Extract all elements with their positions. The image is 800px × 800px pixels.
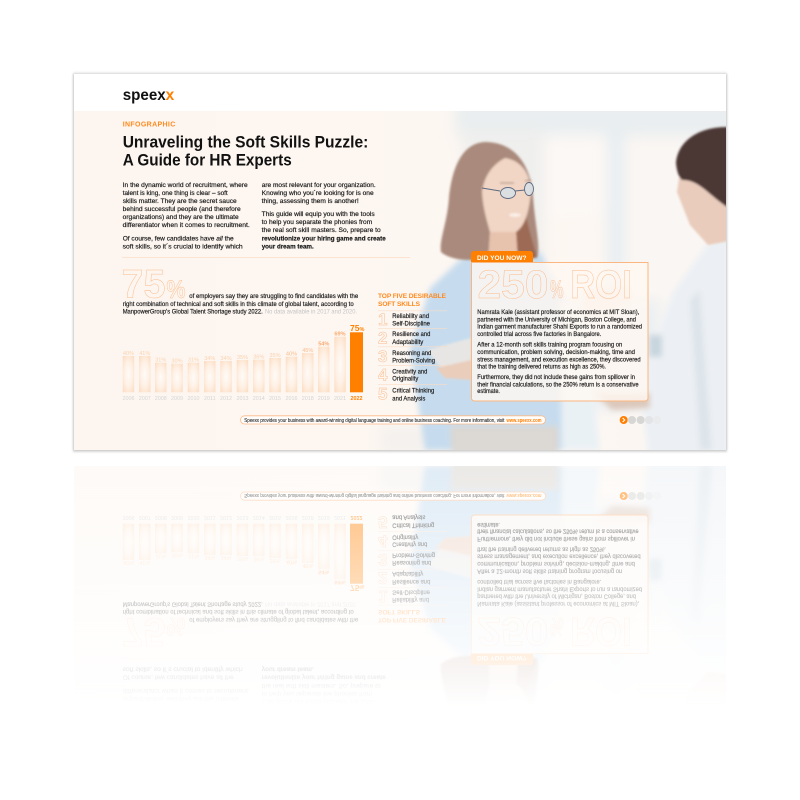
- bar chart: employers struggling by year: 40%: [123, 351, 134, 357]
- intro text column 1: Of course, few candidates have all the: [123, 235, 234, 242]
- statistic description: ManpowerGroup's Global Talent Shortage study 2022.: [123, 308, 263, 316]
- statistic description: right combination of technical and soft skills in this climate of global talent, according to: [123, 301, 354, 308]
- skill names: Reasoning and: [392, 350, 432, 357]
- bar chart: employers struggling by year: 41%: [139, 351, 150, 357]
- skill names: Problem-Solving: [392, 357, 435, 364]
- big number: 250% ROI: [478, 263, 632, 307]
- skill numerals: 5: [378, 384, 387, 404]
- skill numerals: 4: [378, 366, 388, 384]
- intro text column 2: [262, 182, 386, 250]
- intro text column 2: revolutionize your hiring game and create: [262, 235, 386, 242]
- bar chart: employers struggling by year: 2009: [171, 396, 183, 402]
- title: A Guide for HR Experts: [123, 152, 292, 170]
- panel body text: controlled trial across five factories in Bangalore.: [477, 331, 601, 338]
- skill names: Self-Discipline: [392, 320, 430, 327]
- skill names: Reliability and: [392, 313, 429, 320]
- skill names: Creativity and: [392, 368, 428, 375]
- statistic description: No data available in 2017 and 2020.: [265, 308, 357, 316]
- intro text column 2: your dream team.: [262, 243, 314, 250]
- heading: top five: TOP FIVE DESIRABLE: [378, 293, 447, 300]
- skill names: and Analysis: [392, 395, 426, 402]
- statistic: 75%: %: [166, 276, 186, 304]
- logo: speexx: speex: [123, 87, 166, 104]
- bar chart: employers struggling by year: 2011: [204, 396, 216, 402]
- title: Unraveling the Soft Skills Puzzle:: [123, 134, 368, 152]
- bar chart: employers struggling by year: 54%: [318, 342, 329, 348]
- woman seen from behind: [582, 127, 740, 455]
- bar chart: employers struggling by year: 31%: [155, 358, 166, 364]
- panel body text: partnered with the University of Michigan, Boston College, and: [477, 316, 636, 323]
- callout: 250% ROI panel: [471, 251, 648, 401]
- bar chart: employers struggling by year: 34%: [204, 356, 215, 362]
- skill numerals: [378, 310, 388, 404]
- bar chart: employers struggling by year: 2012: [220, 396, 232, 402]
- bar chart: employers struggling by year: 36%: [253, 355, 264, 361]
- bar chart: employers struggling by year: 2008: [155, 396, 167, 402]
- skill names: [392, 313, 435, 402]
- tab: did you now: DID YOU NOW?: [477, 255, 526, 262]
- pagination dots: [620, 416, 661, 424]
- infographic card with mirrored reflection: [74, 74, 726, 450]
- intro text column 1: [123, 182, 250, 250]
- bar chart: employers struggling by year: 75%: [350, 323, 364, 333]
- bar chart: employers struggling by year: 2006: [122, 396, 134, 402]
- bar chart: employers struggling by year: 45%: [302, 348, 313, 354]
- footer strip: more information: [240, 416, 546, 424]
- intro text column 1: skills matter. They are the secret sauce: [123, 198, 237, 205]
- panel: top five desirable soft skills: [378, 293, 447, 404]
- intro text column 1: soft skills, so it´s crucial to identify which: [123, 243, 243, 250]
- bar chart: employers struggling by year: 2013: [236, 396, 248, 402]
- title: [123, 134, 368, 170]
- bar chart: employers struggling by year: 2019: [318, 396, 330, 402]
- intro text column 1: organizations) and they are the ultimate: [123, 214, 239, 221]
- panel body text: After a 12-month soft skills training program focusing on: [477, 342, 623, 349]
- intro text column 1: differentiator when it comes to recruitment.: [123, 222, 250, 229]
- bar chart: employers struggling by year: 2014: [253, 396, 265, 402]
- panel body text: communication, problem solving, decision-making, time and: [477, 349, 635, 356]
- statistic description: of employers say they are struggling to find candidates with the: [189, 293, 359, 300]
- intro text column 1: behind successful people (and therefore: [123, 206, 241, 213]
- bar chart: employers struggling by year: 2007: [139, 396, 151, 402]
- big number: 250% ROI: ROI: [570, 263, 632, 307]
- eyebrow: infographic: INFOGRAPHIC: [123, 122, 175, 128]
- icon: glasses: [482, 182, 534, 198]
- bar chart: employers struggling by year: 40%: [286, 352, 297, 358]
- bar chart: employers struggling by year: 30%: [171, 359, 183, 365]
- skill numerals: 1: [378, 310, 387, 329]
- panel body text: that the training delivered returns as high as 250%.: [477, 364, 606, 371]
- bar chart: employers struggling by year: 2022: [350, 396, 362, 402]
- skill numerals: 2: [378, 328, 387, 348]
- bar chart: employers struggling by year: 2015: [269, 396, 281, 402]
- tab: did you now: [471, 251, 533, 262]
- logo: speexx: x: [166, 87, 175, 104]
- statistic description: [123, 293, 359, 316]
- intro text column 1: In the dynamic world of recruitment, where: [123, 182, 248, 189]
- panel box: [472, 262, 648, 401]
- intro text column 2: the real soft skill masters. So, prepare to: [262, 227, 381, 234]
- intro text column 1: talent is king, one thing is clear – soft: [123, 190, 228, 197]
- bar chart: employers struggling by year: 2021: [334, 396, 346, 402]
- intro text column 2: to help you separate the phonies from: [262, 219, 373, 226]
- intro text column 2: thing, assessing them is another!: [262, 198, 359, 205]
- bar chart: employers struggling by year: 2010: [188, 396, 200, 402]
- heading: top five: [378, 293, 447, 308]
- bar chart: employers struggling by year: 35%: [269, 353, 281, 359]
- panel body text: stress management, and execution excellence, they discovered: [477, 356, 641, 363]
- skill numerals: 3: [378, 347, 387, 366]
- intro text column 2: are most relevant for your organization.: [262, 182, 376, 189]
- bar chart: employers struggling by year: [122, 323, 364, 402]
- skill names: Critical Thinking: [392, 387, 435, 394]
- heading: top five: SOFT SKILLS: [378, 301, 421, 308]
- bar chart: employers struggling by year: 35%: [237, 355, 248, 361]
- statistic: 75%: 75: [122, 262, 166, 306]
- bar chart: employers struggling by year: 34%: [220, 356, 232, 362]
- bar chart: employers struggling by year: 31%: [188, 358, 199, 364]
- panel body text: [477, 309, 642, 395]
- panel body text: Namrata Kale (assistant professor of economics at MIT Sloan),: [477, 309, 639, 316]
- skill names: Resilience and: [392, 331, 431, 338]
- big number: 250% ROI: %: [550, 276, 564, 304]
- bar chart: employers struggling by year: 2016: [286, 396, 298, 402]
- panel body text: estimate.: [477, 388, 500, 395]
- skill names: Originality: [392, 375, 419, 382]
- footer strip: more information: Speexx provides your business with award-winning digital language training and online business coaching. For more information, visit: [244, 418, 505, 424]
- statistic: 75%: [122, 262, 186, 306]
- skill names: Adaptability: [392, 339, 424, 346]
- photo background: two women talking: [74, 100, 745, 455]
- big number: 250% ROI: 250: [478, 263, 548, 307]
- panel body text: Indian garment manufacturer Shahi Exports to run a randomized: [477, 323, 642, 330]
- woman with glasses: [410, 142, 600, 455]
- bar chart: employers struggling by year: 2018: [302, 396, 314, 402]
- footer strip: more information: www.speexx.com: [506, 418, 542, 424]
- bar chart: employers struggling by year: 69%: [334, 332, 346, 338]
- panel body text: Furthermore, they did not include these gains from spillover in: [477, 374, 635, 381]
- panel body text: their financial calculations, so the 250% return is a conservative: [477, 381, 639, 388]
- intro text column 2: This guide will equip you with the tools: [262, 211, 375, 218]
- intro text column 2: Knowing who you´re looking for is one: [262, 190, 374, 197]
